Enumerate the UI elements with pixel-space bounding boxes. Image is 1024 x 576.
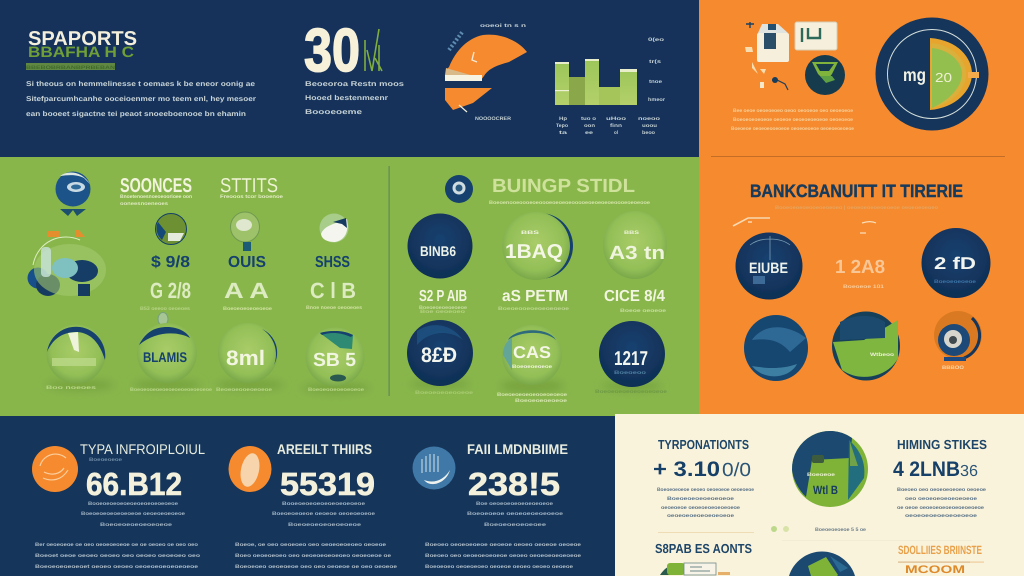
stat block: fail mdnbime: Boe oeoeoeoeoeoeoeoeoe (476, 501, 553, 507)
stat labels: navy row (151, 254, 350, 271)
chart: orange fan: NOOOOCRER (475, 116, 511, 122)
stat labels: pale row: A A (224, 278, 269, 303)
icon: orange ring figure (934, 311, 982, 371)
icon: green globe badge (805, 55, 845, 95)
chart axis labels (556, 37, 665, 136)
panel: orange right column (699, 0, 1024, 416)
chart: green navy circle (792, 431, 868, 507)
chart: orange fan: ooeoi tn s n (480, 23, 526, 29)
chart: navy donut gauge: mg (903, 65, 926, 85)
text block: three paragraphs: Boeoeoeoeoeoet oeoeo oeoeo oeoeoeoeoeoeoeoe (35, 564, 198, 570)
circle grid: orange row 2: Wtbeoo (870, 352, 894, 358)
chart axis labels: tnoe (649, 79, 662, 85)
divider line (388, 166, 390, 396)
sphere row: lower stats: BLAMIS (143, 349, 187, 365)
stat labels: navy row: $ 9/8 (151, 254, 190, 271)
circle grid: orange row 1: Boeoeoe 101 (843, 284, 884, 290)
stat block: right: HIMING STIKES (897, 437, 987, 452)
stat labels: middle row: Boeoe oeoeoe (620, 308, 666, 314)
stat block: benefit times: Booeoeoeoeoeoeoeoeoeoe (282, 501, 365, 507)
heading: sports graphic title: SPAPORTS (28, 28, 137, 50)
text block: three paragraphs: Ber oeoeoeoe oe oeo oeoeoeoeoe oe oe oeoeo oe oeo oeo (35, 542, 198, 548)
sphere row: lower stats: SB 5 (313, 350, 356, 371)
text block: three paragraphs: Boeoe, oe oeo oeoeoeo oeo oeoeoeoeoeo oeoeoe (235, 542, 386, 548)
chart axis labels: beoo (642, 130, 655, 136)
stat block: left (653, 437, 754, 519)
circle grid: row 2: 8£Ð (421, 344, 457, 367)
stat block: left: Boeoeoeoeoeoeoeoe (667, 496, 734, 502)
chart axis labels: uoou (642, 123, 657, 129)
icon: device (660, 563, 730, 575)
chart axis labels: finn (610, 123, 622, 129)
stat block: benefit times: Boeoeoeoeoeoeoeoe (288, 522, 361, 528)
heading: lower right: SDOLLIIES BRIINSTE (898, 543, 982, 557)
chart: lower circle (789, 552, 855, 576)
text block: number description: Hooed bestenmeenr (305, 94, 388, 102)
captions: row 2: Boeoeoeoeoeoeoeoeoe (595, 389, 667, 395)
stat labels: middle row: aS PETM (502, 288, 568, 305)
panel: cream bottom right (615, 414, 1024, 576)
heading: sports graphic title (26, 28, 137, 71)
sphere row: lower stats: 8ml (226, 347, 265, 370)
chart axis labels: ol (614, 130, 619, 136)
heading: sports graphic title: BBAFHA H C (28, 44, 134, 61)
text block: three paragraphs: Boeoeoeo oeoeoeoeo oeoeoe oeoeo oeoeo oeoeoe (425, 564, 573, 570)
divider line (711, 156, 1005, 157)
stat block: type info: Boeoeoeoe (89, 457, 122, 463)
heading: bungp stidl: Boeoenooeoooeoeoooeoeoeoeooooeoeoeoeoeoooeoeoeooe (489, 200, 650, 206)
heading: sources: SOONCES (120, 175, 192, 197)
legend row: Boeoeoeoeoe 5 5 oe (815, 527, 866, 533)
circle grid: orange row 1: EIUBE (749, 260, 788, 277)
stat block: right: oeo oeoeoeoeoeoeoeoe (905, 496, 977, 502)
circle grid: orange row 2 (744, 312, 900, 381)
stat block: type info: 66.B12 (86, 466, 182, 502)
circle grid: row 2: Boeoeoo (614, 370, 646, 376)
stat block: right: oe oeoe oeoeoeoeoeoeoeoeoeoe (897, 505, 984, 511)
stat block: type info: TYPA INFROIPLOIUL (80, 441, 205, 457)
captions: sphere row: Boeoeooeoeoeoeoe (308, 387, 364, 393)
captions: sphere row: Beoeoeooeoeoeoe (216, 387, 272, 393)
stat labels: navy row: OUIS (228, 254, 266, 271)
text block: three paragraphs: Boeo oeoeoeoeo oeo oeoeoeoeoeoeo oeoeoeoe oe (235, 553, 391, 559)
text block: three paragraphs (35, 542, 581, 570)
text block: orange caption (731, 108, 854, 132)
icon: globe (56, 172, 90, 216)
circle grid: orange row 1: 2 fD (934, 254, 976, 273)
stat block: type info: Boeoeoeoeoeoeoeoe oeoeoeoeoeoe (81, 511, 185, 517)
stat labels: pale row: C l B (310, 278, 356, 303)
stat block: fail mdnbime: FAII LMDNBIIME (467, 441, 568, 457)
legend row (658, 526, 972, 541)
chart axis labels: noeoo (638, 116, 660, 122)
stat labels: middle row: Boeoeooeoeoeoeoeoe (498, 306, 569, 312)
stat labels: pale row: G 2/8 (150, 278, 191, 303)
stat labels: navy row: SHSS (315, 254, 350, 271)
stat block: benefit times: AREEILT THIIRS (277, 441, 372, 457)
circle grid: row 1: BBS (624, 230, 640, 236)
stat block: benefit times (228, 441, 375, 528)
chart: navy donut gauge: 20 (935, 70, 952, 85)
panel: top navy header (0, 0, 700, 157)
big number: 30: 30 (304, 16, 360, 84)
circle grid: row 2: Boeoeoeoeoe (512, 364, 552, 370)
stat labels: middle row (419, 288, 666, 315)
captions: sphere row: Boo noeoes (46, 385, 96, 391)
stat block: fail mdnbime: Boeoeoeoe oeoeoeoeoeoeoe (467, 511, 563, 517)
stat block: left: oeoeoeoe oeoeoeoeoeoeoeoe (661, 505, 740, 511)
stat labels: middle row: S2 P AIB (419, 288, 467, 305)
captions: row 2: Boeoeoeoeoeooeoeoeoe (497, 392, 567, 398)
panel: green sources and stats (0, 157, 700, 416)
chart: orange fan (445, 23, 527, 122)
stat block: fail mdnbime: 238!5 (468, 466, 560, 502)
stat labels: pale row: Boeoeoeoeoeoeoe (223, 306, 272, 312)
heading: bungp stidl: BUINGP STIDL (492, 176, 635, 197)
stat labels: pale row: B53 oeeoo oeoeoes (140, 306, 190, 312)
stat labels: middle row: Boeoeoeoeoeoeoe (419, 305, 467, 311)
captions: row 2: Boeoeoeoeooeoe (415, 390, 473, 396)
sphere row: lower stats (46, 323, 370, 394)
stat labels: middle row: Boe oeoeoeo (420, 309, 465, 315)
icon row: round badges (156, 212, 348, 251)
chart axis labels: ta (559, 130, 567, 136)
stat block: type info: Booeoeoeoeoeoeoeoeoeoeoeoe (88, 501, 178, 507)
text block: three paragraphs: Boeoeoeo oeoeoeoe oeo oeo oeoeoe oe oeo oeoeoe (235, 564, 397, 570)
heading: stats: STTITS (220, 175, 278, 197)
text block: three paragraphs: Boeoeo oeoeoeoeoe oeoeoe oeoeo oeoeoe oeoeoe (425, 542, 581, 548)
stat block: fail mdnbime: Boeoeoeoeoeoee (484, 522, 546, 528)
chart axis labels: 0(eo (648, 37, 664, 43)
text block: number description: Beoeoroa Restn moos (305, 81, 404, 88)
stat block: fail mdnbime (412, 441, 568, 528)
circle grid: orange row 1: 1 2A8 (835, 257, 885, 278)
circle grid: row 2: CAS (513, 343, 551, 362)
chart axis labels: Hp (559, 116, 567, 122)
stat block: right: 4 2LNB (893, 458, 960, 481)
circle grid: row 1 (408, 211, 667, 280)
stat block: type info (32, 441, 205, 528)
text block: number description (305, 81, 404, 116)
captions: row 2 (415, 389, 667, 404)
circle grid: orange row 1 (733, 218, 990, 300)
chart: green navy circle: Boeoeoe (807, 472, 835, 478)
stat block: left: TYRPONATIONTS (658, 437, 749, 452)
text block: intro paragraph (26, 80, 256, 118)
stat block: right: Boeoeo oeo oeoeoeoeoeo oeoeoe (897, 487, 986, 493)
stat block: left: oeoeoeoeoeoeoeoeoe (667, 513, 734, 519)
chart: green navy circle: Wtl B (813, 483, 838, 497)
captions: sphere row: Boeoeooeoeoeoeoeoeoeoeoeoe (130, 387, 212, 393)
heading: bank title: Booeoeoeoeooeoeoeoeo | oeoeoeoeoeoeoeoe oeoeoeoeoeo (775, 205, 938, 211)
badge: section icon (445, 175, 473, 203)
illustration: equipment collage (745, 22, 837, 90)
stat block: left: Boeoeoeoeoe oeoeo oeoeoeoe oeoeoeoe (657, 487, 754, 493)
illustration: bubble cluster (28, 230, 106, 296)
heading: sports graphic title: BBEBOBRBANBPRBEBAN (26, 65, 116, 71)
circle grid: row 2 (407, 320, 665, 393)
circle grid: row 1: 1BAQ (505, 241, 563, 263)
icon: orange ring figure: BBBOO (942, 365, 964, 371)
text block: orange caption: Bee oeoe oeoeoeoeo oeoo oeooeoe oeo oeoeoeoe (733, 108, 853, 114)
heading: lower left: S8PAB ES AONTS (655, 541, 752, 556)
chart axis labels: tuo o (581, 116, 596, 122)
stat labels: pale row (140, 278, 362, 312)
panel: bottom navy stats (0, 416, 615, 576)
chart: navy donut gauge (876, 18, 988, 130)
circle grid: orange row 1: Boeoeoeoeoe (934, 279, 976, 285)
heading: bungp stidl (489, 176, 650, 206)
small marker badge (158, 312, 168, 326)
heading: sources: Bnoetenoesnoeoeoorioee oon (120, 194, 192, 200)
stat block: left: 0/0 (722, 460, 751, 481)
heading: lower right: MCOOM (905, 564, 965, 576)
circle grid: row 2: 1217 (614, 348, 648, 370)
stat labels: middle row: CICE 8/4 (604, 288, 665, 305)
chart axis labels: tr(s (649, 59, 661, 65)
heading: stats: Freooos tcor booenoe (220, 194, 283, 200)
stat block: benefit times: Boeoeoeoeoe oeoeoe oeoeoeoeoe (272, 511, 375, 517)
text block: intro paragraph: Si theous on hemmelinesse t oemaes k be eneor oonig ae (26, 80, 255, 88)
stat block: right (893, 437, 987, 519)
text block: orange caption: Boeoeoe oeoeoeooeoeoe oeoeoeoeoe oeoeoeoeoeoe (731, 126, 854, 132)
heading: bank title (750, 181, 963, 211)
chart axis labels: ee (585, 130, 593, 136)
text block: orange caption: Boeoeoeoeoeoe oeoeoe oeoeoeoeoeoe oeoeoeoe (733, 117, 853, 123)
stat block: left: + 3.10 (653, 458, 720, 481)
chart axis labels: Tepo (556, 123, 568, 129)
text block: three paragraphs: Boeoet oeoe oeoeo oeoeo oeo oeoeo oeoeoeo oeo (35, 553, 200, 559)
heading: lower right (898, 543, 984, 576)
circle grid: row 1: BlNB6 (420, 243, 456, 259)
captions: sphere row (46, 385, 364, 393)
captions: row 2: Boeoeoeoeoeoe (515, 398, 567, 404)
chart: green bars (555, 59, 637, 105)
text block: intro paragraph: ean booeet sigactne tei peaot snoeeboenooe bn ehamin (26, 110, 246, 118)
chart axis labels: oon (584, 123, 595, 129)
stat block: right: 36 (960, 463, 978, 480)
stat block: right: oeoeoeoeoeoeoeoeoe (905, 513, 977, 519)
text block: three paragraphs: Boeoeo oeo oeoeoeoeoeoe oeoeo oeoeoeoeoeoeoe (425, 553, 581, 559)
stat labels: pale row: Bnoe noeoe oeooeoes (306, 305, 362, 311)
heading: sources (120, 175, 192, 207)
circle grid: row 1: A3 tn (609, 243, 665, 264)
chart axis labels: uHoo (606, 116, 626, 122)
text block: intro paragraph: Sitefparcumhcanhe ooceioenmer mo teem enl, hey mesoer (26, 95, 256, 103)
stat block: benefit times: 55319 (280, 466, 375, 502)
heading: bank title: BANKCBANUITT IT TIRERIE (750, 181, 963, 201)
chart axis labels: hmeor (648, 97, 665, 103)
circle grid: row 1: BBS (521, 230, 540, 236)
stat block: type info: Boeoeoeoeoeoeoeoe (100, 522, 172, 528)
text block: number description: Boooeoeme (305, 109, 362, 116)
heading: sources: ooneesnoeneoes (120, 201, 168, 207)
